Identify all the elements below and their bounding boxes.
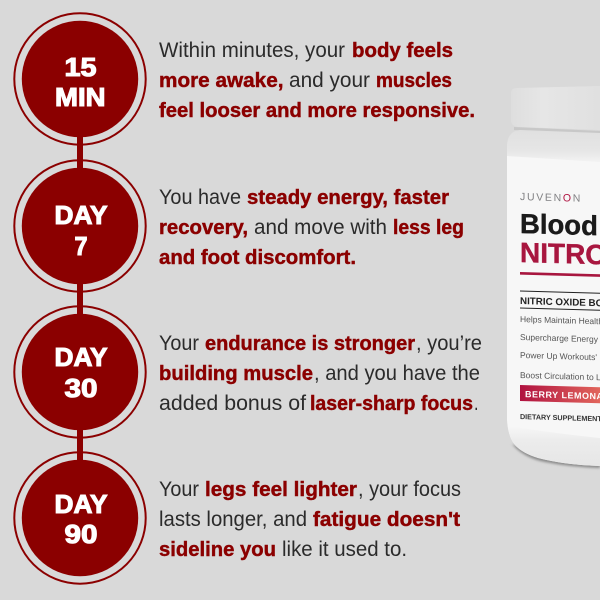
text block: day 7: recovery,: [159, 216, 248, 239]
text block: 15 min: and your: [289, 69, 370, 92]
text block: day 90: sideline you: [159, 538, 276, 561]
text block: day 7: steady energy, faster: [247, 186, 449, 209]
bottle neck: [507, 130, 600, 165]
timeline step: 15 min: [14, 13, 146, 145]
text block: day 30: Your: [159, 332, 199, 355]
text block: 15 min: Within minutes, your: [159, 39, 345, 62]
timeline step: day 90: DAY: [54, 491, 108, 519]
text block: day 90: [159, 478, 461, 561]
text block: day 90: , your focus: [358, 478, 461, 501]
text block: day 7: [159, 186, 464, 269]
bottle shadow: [512, 444, 600, 468]
red rule: [520, 272, 600, 277]
text block: 15 min: muscles: [376, 69, 452, 92]
text block: 15 min: feel looser and more responsive.: [159, 99, 475, 122]
benefits list: [520, 314, 600, 382]
text block: day 7: You have: [159, 186, 241, 209]
flavor band: [520, 385, 600, 404]
timeline connector: [77, 130, 83, 530]
bottle cap: [511, 86, 600, 130]
text block: day 30: , and you have the: [314, 362, 480, 385]
cap seam: [514, 127, 600, 134]
brand name: JUVENON: [520, 191, 582, 205]
bottle body: [507, 156, 600, 466]
text block: day 30: , you’re: [416, 332, 482, 355]
text block: day 7: and foot discomfort.: [159, 246, 356, 269]
timeline step: day 7: 7: [74, 233, 88, 261]
text block: day 30: building muscle: [159, 362, 313, 385]
text block: day 90: lasts longer, and: [159, 508, 307, 531]
product bottle: [507, 86, 600, 468]
bottle base: [508, 426, 600, 466]
supplement line: DIETARY SUPPLEMENT: [520, 412, 600, 423]
timeline step: 15 min: 15: [64, 54, 96, 82]
benefits list: Power Up Workouts': [520, 350, 597, 362]
timeline step: 15 min: MIN: [55, 84, 106, 112]
text block: day 30: laser-sharp focus: [310, 392, 473, 415]
text block: 15 min: more awake,: [159, 69, 284, 92]
text block: day 30: .: [474, 392, 478, 415]
timeline step: day 30: 30: [64, 375, 98, 403]
text block: 15 min: body feels: [352, 39, 453, 62]
text block: day 90: fatigue doesn't: [313, 508, 460, 531]
text block: day 90: Your: [159, 478, 199, 501]
timeline step: day 7: [14, 160, 146, 292]
text block: day 30: added bonus of: [159, 392, 306, 415]
benefits list: Boost Circulation to L: [520, 370, 600, 382]
text block: day 30: [159, 332, 482, 415]
text block: day 90: legs feel lighter: [205, 478, 357, 501]
text block: day 7: and move with: [254, 216, 387, 239]
timeline step: day 30: [14, 306, 146, 438]
text block: 15 min: [159, 39, 475, 122]
product name: Blood: [520, 208, 598, 241]
timeline step: day 7: DAY: [54, 202, 108, 230]
timeline step: day 30: DAY: [54, 344, 108, 372]
text block: day 90: like it used to.: [282, 538, 407, 561]
bottle label: [520, 191, 600, 424]
text block: day 7: less leg: [393, 216, 464, 239]
text block: day 30: endurance is stronger: [205, 332, 415, 355]
subtitle: [520, 291, 600, 311]
timeline step: day 90: 90: [64, 521, 98, 549]
timeline step: day 90: [14, 452, 146, 584]
